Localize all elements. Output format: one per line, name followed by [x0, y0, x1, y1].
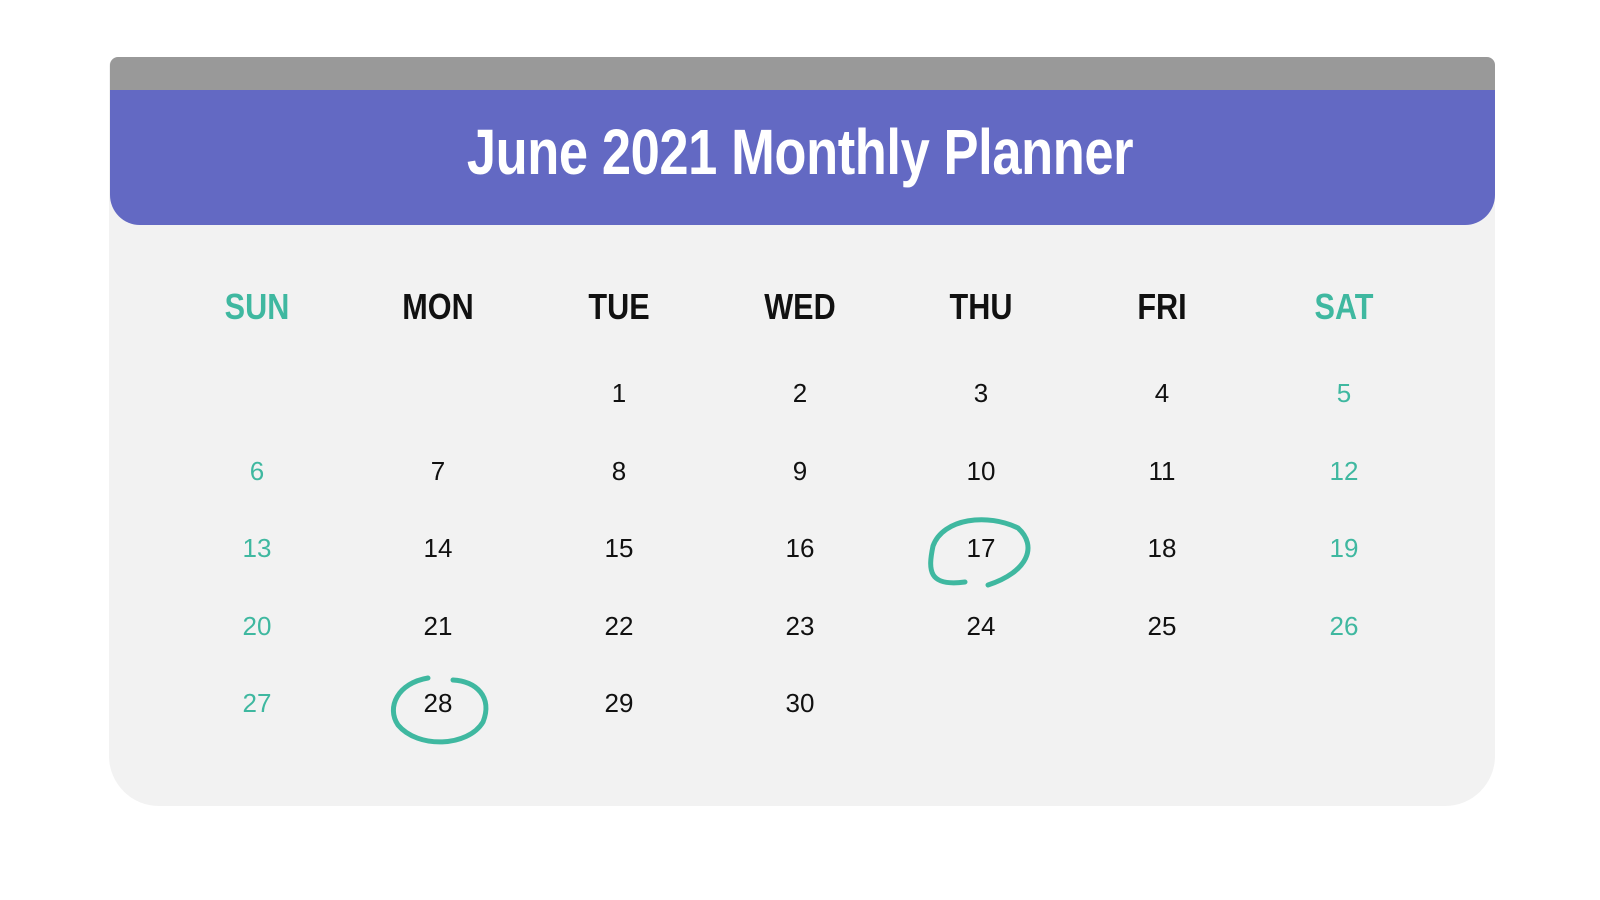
dates grid: 27: [243, 688, 271, 718]
dates grid: 14: [424, 533, 452, 563]
dates grid: 16: [786, 533, 814, 563]
icon: circle 28: [393, 678, 486, 742]
dates grid: 1: [612, 378, 626, 408]
weekday headers: [225, 286, 1374, 327]
dates grid: 19: [1330, 533, 1358, 563]
dates grid: [243, 378, 1358, 718]
dates grid: 12: [1330, 456, 1358, 486]
dates grid: 13: [243, 533, 271, 563]
header top strip: [110, 57, 1495, 91]
dates grid: 17: [967, 533, 995, 563]
dates grid: 21: [424, 611, 452, 641]
dates grid: 5: [1337, 378, 1351, 408]
dates grid: 24: [967, 611, 995, 641]
weekday headers: WED: [764, 286, 836, 327]
title: June 2021 Monthly Planner: [467, 116, 1133, 188]
dates grid: 28: [424, 688, 452, 718]
dates grid: 22: [605, 611, 633, 641]
dates grid: 29: [605, 688, 633, 718]
dates grid: 2: [793, 378, 807, 408]
header band: [110, 90, 1495, 225]
weekday headers: MON: [402, 286, 474, 327]
dates grid: 15: [605, 533, 633, 563]
weekday headers: THU: [950, 286, 1012, 327]
icon: circle 17: [931, 520, 1028, 585]
weekday headers: SAT: [1315, 286, 1373, 327]
dates grid: 10: [967, 456, 995, 486]
dates grid: 26: [1330, 611, 1358, 641]
dates grid: 23: [786, 611, 814, 641]
dates grid: 7: [431, 456, 445, 486]
dates grid: 11: [1148, 456, 1176, 486]
dates grid: 30: [786, 688, 814, 718]
dates grid: 9: [793, 456, 807, 486]
dates grid: 3: [974, 378, 988, 408]
dates grid: 8: [612, 456, 626, 486]
dates grid: 4: [1155, 378, 1169, 408]
dates grid: 18: [1148, 533, 1176, 563]
weekday headers: TUE: [588, 286, 650, 327]
dates grid: 25: [1148, 611, 1176, 641]
weekday headers: FRI: [1137, 286, 1187, 327]
dates grid: 20: [243, 611, 271, 641]
weekday headers: SUN: [225, 286, 289, 327]
dates grid: 6: [250, 456, 264, 486]
panel: calendar card: [109, 57, 1495, 806]
